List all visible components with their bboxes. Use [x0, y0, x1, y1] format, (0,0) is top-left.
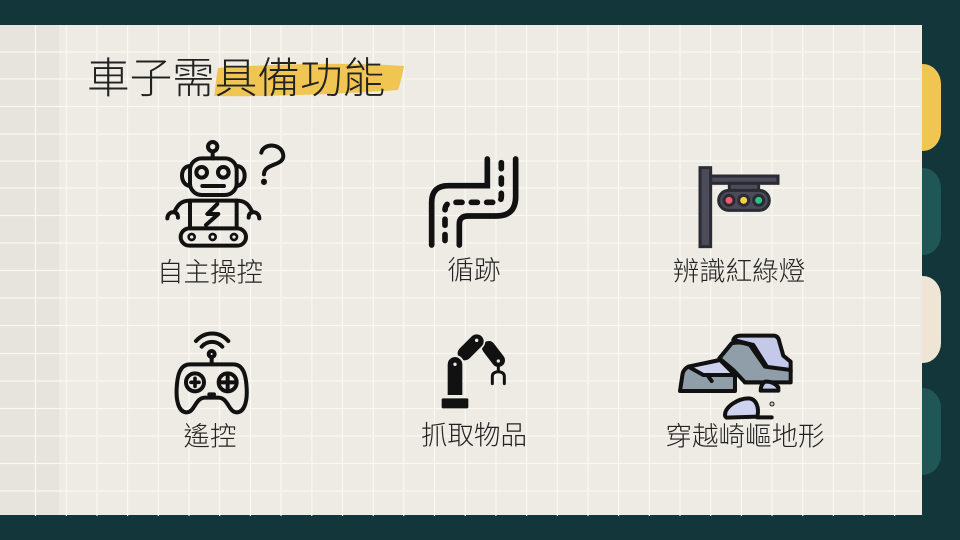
icon: robot with question mark	[167, 142, 283, 246]
label: 循跡: 循跡	[448, 256, 500, 286]
icon: traffic light	[700, 168, 778, 247]
forearm	[489, 348, 498, 360]
label: 抓取物品: 抓取物品	[421, 420, 527, 450]
title: 車子需具備功能	[87, 55, 385, 103]
icon: wireless game controller	[177, 333, 247, 412]
tab: teal upper	[921, 168, 941, 255]
upper arm	[465, 341, 477, 353]
title highlight brush	[214, 64, 404, 96]
label: 遙控: 遙控	[184, 422, 236, 452]
tab: yellow	[921, 64, 941, 151]
column	[448, 357, 462, 395]
label: 辨識紅綠燈: 辨識紅綠燈	[673, 256, 805, 286]
base	[442, 398, 468, 408]
icon: robotic arm	[442, 339, 504, 408]
label: 自主操控: 自主操控	[157, 258, 263, 288]
icon: winding road	[432, 159, 516, 245]
tab: cream	[921, 276, 941, 363]
label: 穿越崎嶇地形: 穿越崎嶇地形	[666, 422, 824, 452]
tab: teal lower	[921, 388, 941, 475]
icon: rocks	[680, 336, 791, 418]
